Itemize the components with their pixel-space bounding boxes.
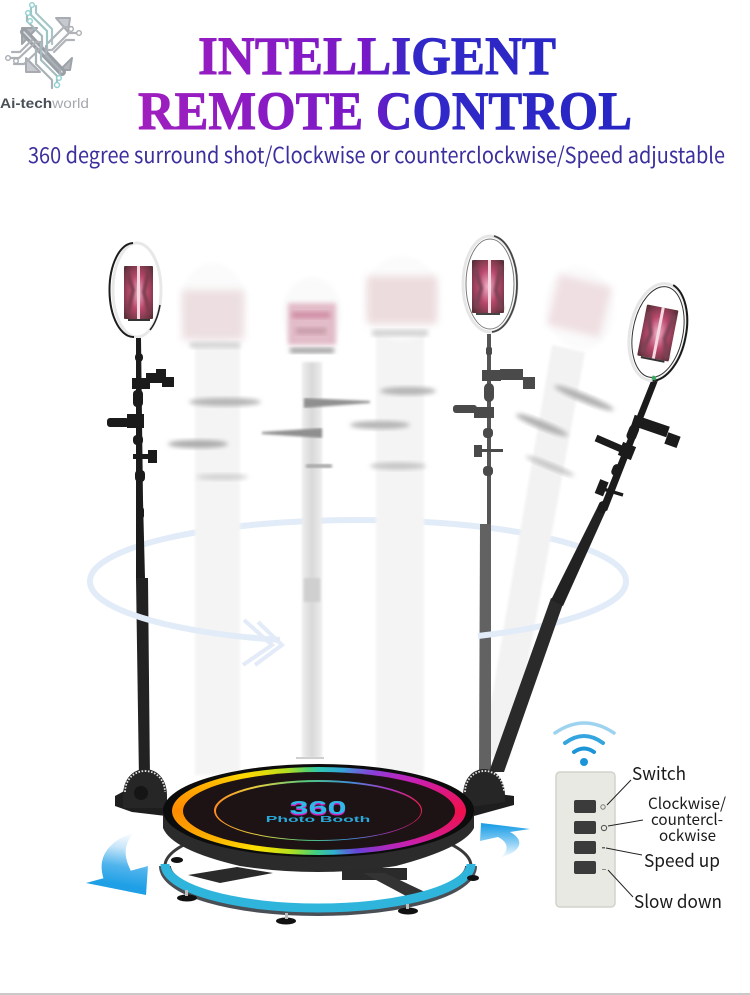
ghost stand C xyxy=(350,256,440,775)
blue arrow, right xyxy=(480,823,530,858)
inner thin ring xyxy=(214,780,422,841)
disc face xyxy=(183,772,455,850)
rotation chevrons xyxy=(243,620,282,665)
remote labels: Speed up xyxy=(644,847,720,873)
turntable top with rainbow ring xyxy=(163,764,474,857)
remote labels: Slow down xyxy=(634,888,722,914)
360 logo: 360 xyxy=(289,798,347,818)
turntable bracket, left xyxy=(115,769,167,816)
rainbow ring xyxy=(172,767,466,855)
wifi icon xyxy=(555,723,614,766)
logo: Ai-techworld xyxy=(0,3,89,111)
remote labels xyxy=(632,760,726,914)
rotation orbit: back arc xyxy=(90,520,626,581)
turntable side wall xyxy=(163,809,474,872)
blue arrow, left xyxy=(86,832,148,895)
turntable bracket, right xyxy=(463,769,514,816)
stand with ring light, left xyxy=(107,243,174,780)
ghost stand B xyxy=(262,277,370,759)
LED base ring and legs xyxy=(165,822,479,924)
ghost stand D xyxy=(482,260,622,760)
360 logo: Photo Booth xyxy=(266,814,370,824)
title: REMOTE CONTROL xyxy=(138,81,632,141)
title: INTELLIGENT xyxy=(198,26,556,86)
remote labels: ockwise xyxy=(659,824,716,846)
stand with ring light, tilted right xyxy=(489,279,695,772)
rotation orbit: front arcs xyxy=(90,581,626,640)
remote labels: Switch xyxy=(632,760,686,786)
title xyxy=(138,26,632,141)
remote leader lines xyxy=(606,780,643,897)
360 logo xyxy=(266,798,370,824)
remote labels: Clockwise/ xyxy=(648,792,726,814)
stand with ring light, centre right xyxy=(453,236,535,778)
remote labels: countercl- xyxy=(651,808,723,830)
ghost stand A xyxy=(168,263,261,775)
bottom rule xyxy=(0,993,750,995)
logo wordmark: Ai-tech world xyxy=(0,96,89,111)
remote control xyxy=(556,772,615,907)
